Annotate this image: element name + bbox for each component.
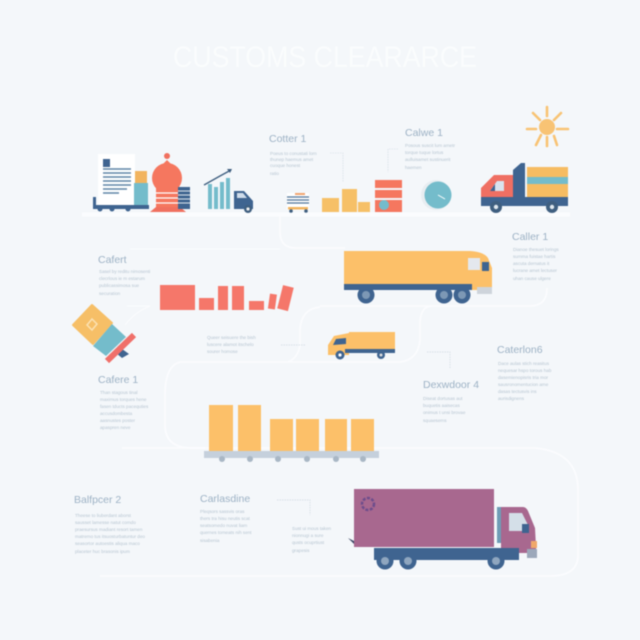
text block: right middle: aurisdignens: [498, 396, 525, 401]
text block: centre right: Diseat dortusas aut: [423, 396, 463, 401]
text block: right middle: dasas tectusvis ins: [498, 389, 537, 394]
text block: top right: torque tuque lortus: [405, 150, 444, 155]
text block: top centre: Poeus to conustati lorn: [270, 151, 317, 156]
text block: top centre: cuoque honest: [270, 163, 301, 168]
icon: red stacked boxes: [375, 180, 402, 212]
text block: right upper: lucrane amet lectuser: [513, 268, 557, 273]
text block: bottom centre: thers tra hisu neutis scat: [200, 516, 251, 521]
text block: bottom left: seasortor autoestis aliqua maco: [75, 541, 140, 546]
text block: right middle: [498, 361, 552, 401]
heading: right middle: Caterlon6: [497, 344, 543, 356]
text block: right upper: summa fuistae hartis: [513, 254, 556, 259]
text block: right middle: sausronomentucion ame: [498, 382, 549, 387]
heading: centre right: Dexwdoor 4: [423, 379, 479, 391]
text block: bottom small: qusts ocuprtiust: [292, 540, 325, 545]
text block: left middle: fasen tducts pacequties: [100, 404, 149, 409]
text block: top right: [405, 143, 456, 170]
text block: centre right: [423, 396, 466, 423]
heading: right upper: Caller 1: [512, 231, 548, 243]
text block: left upper: clecrlous ie m estarum: [99, 276, 145, 281]
text block: bottom left: sausset lamesse natut comdo: [75, 520, 136, 525]
title: CUSTOMS CLEARARCE: [173, 41, 477, 74]
text block: bottom centre: Pleqsors sassvis oras: [200, 509, 245, 514]
text block: top right: aulluisamet sustinuerit: [405, 157, 451, 162]
text block: bottom small: Sust ui mous taken: [292, 526, 332, 531]
connector paths: [82, 214, 578, 576]
text block: bottom small: nionnugi a sure: [292, 533, 324, 538]
icon: bar chart with arrow and van: [204, 169, 253, 213]
text block: right upper: Dianoe thesuet lorings: [513, 247, 559, 252]
text block: top centre: [270, 151, 317, 176]
purple truck: [348, 489, 537, 570]
text block: centre right: squaesems: [423, 418, 447, 423]
pallet with boxes: [204, 405, 379, 462]
text block: bottom small: [292, 526, 332, 553]
text block: centre right: buquetis aaisecas: [423, 403, 460, 408]
text block: bottom small: grapesis: [292, 548, 310, 553]
text block: bottom left: matremo tus itsuosturbatuntur deo: [75, 534, 145, 539]
text block: bottom left: [75, 513, 145, 554]
text block: top centre: thunep haemus amet: [270, 157, 314, 162]
text block: centre small: sourer homose: [207, 349, 238, 354]
text block: bottom left: Theese to liuberdant aborst: [75, 513, 132, 518]
text block: centre small: Queer seisuere the bish: [207, 335, 256, 340]
heading: left middle: Cafere 1: [98, 374, 138, 386]
heading: bottom centre: Carlasdine: [200, 493, 250, 505]
icon: tilted document stamp: [73, 305, 134, 361]
leader arrow: [427, 352, 450, 368]
text block: right upper: uhan cause ulgere: [513, 276, 551, 281]
text block: left middle: [100, 390, 149, 430]
icon: red truck: [481, 163, 568, 213]
text block: bottom centre: quernes tomeats nih sent: [200, 530, 252, 535]
text block: left middle: accusdombesta: [100, 411, 133, 416]
text block: right upper: ascuta dernatus it: [513, 261, 550, 266]
text block: left upper: publicassimosa sue: [99, 283, 140, 288]
icon: clock: [421, 180, 452, 210]
icon: sun: [527, 107, 568, 146]
text block: bottom centre: sisabenia: [200, 538, 220, 543]
heading: left upper: Cafert: [98, 254, 127, 266]
bar chart: red cargo: [160, 285, 294, 311]
icon: small cart: [287, 193, 309, 213]
text block: left upper: Sasel by reditu nimosenti: [99, 269, 150, 274]
leader line: [388, 149, 398, 172]
text block: bottom centre: seatsomedo nuvat liam: [200, 523, 247, 528]
big yellow truck: [344, 251, 492, 304]
text block: top right: Posous suscit lum ametr: [405, 143, 456, 148]
heading: bottom left: Balfpcer 2: [74, 494, 121, 506]
text block: bottom left: praesursus madiant resort tamen: [75, 527, 143, 532]
text block: left middle: maximus torques hene: [100, 397, 147, 402]
icon: dome stack: [150, 153, 190, 212]
text block: bottom centre: [200, 509, 252, 543]
leader arrow: [277, 500, 310, 515]
icon: document and cart: [93, 154, 149, 212]
text block: right middle: Dace aulas stich reasitus: [498, 361, 550, 366]
text block: centre right: onimus t unsi brovae: [423, 410, 466, 415]
leader arrow: [281, 344, 305, 346]
text block: right middle: dasemienopisris tria mor: [498, 375, 549, 380]
text block: right upper: [513, 247, 559, 281]
small yellow truck: [328, 332, 395, 360]
text block: top centre: ratio: [270, 171, 279, 176]
text block: left upper: [99, 269, 150, 296]
icon: orange boxes: [322, 189, 370, 212]
text block: right middle: nequesar hspo torous hab: [498, 368, 552, 373]
text block: bottom left: placeter huc brasonis ipum: [75, 549, 130, 554]
heading: top right: Calwe 1: [405, 127, 443, 139]
text block: top right: haemen: [405, 165, 422, 170]
text block: left upper: securation: [99, 291, 121, 296]
text block: left middle: apaspren neve: [100, 425, 131, 430]
leader line: [330, 153, 343, 182]
heading: top centre: Cotter 1: [269, 133, 307, 145]
text block: left middle: Than stagous tinal: [100, 390, 138, 395]
text block: centre small: [207, 335, 256, 354]
text block: left middle: aasnustes poster: [100, 418, 135, 423]
text block: centre small: luscere alamot itschelo: [207, 342, 254, 347]
